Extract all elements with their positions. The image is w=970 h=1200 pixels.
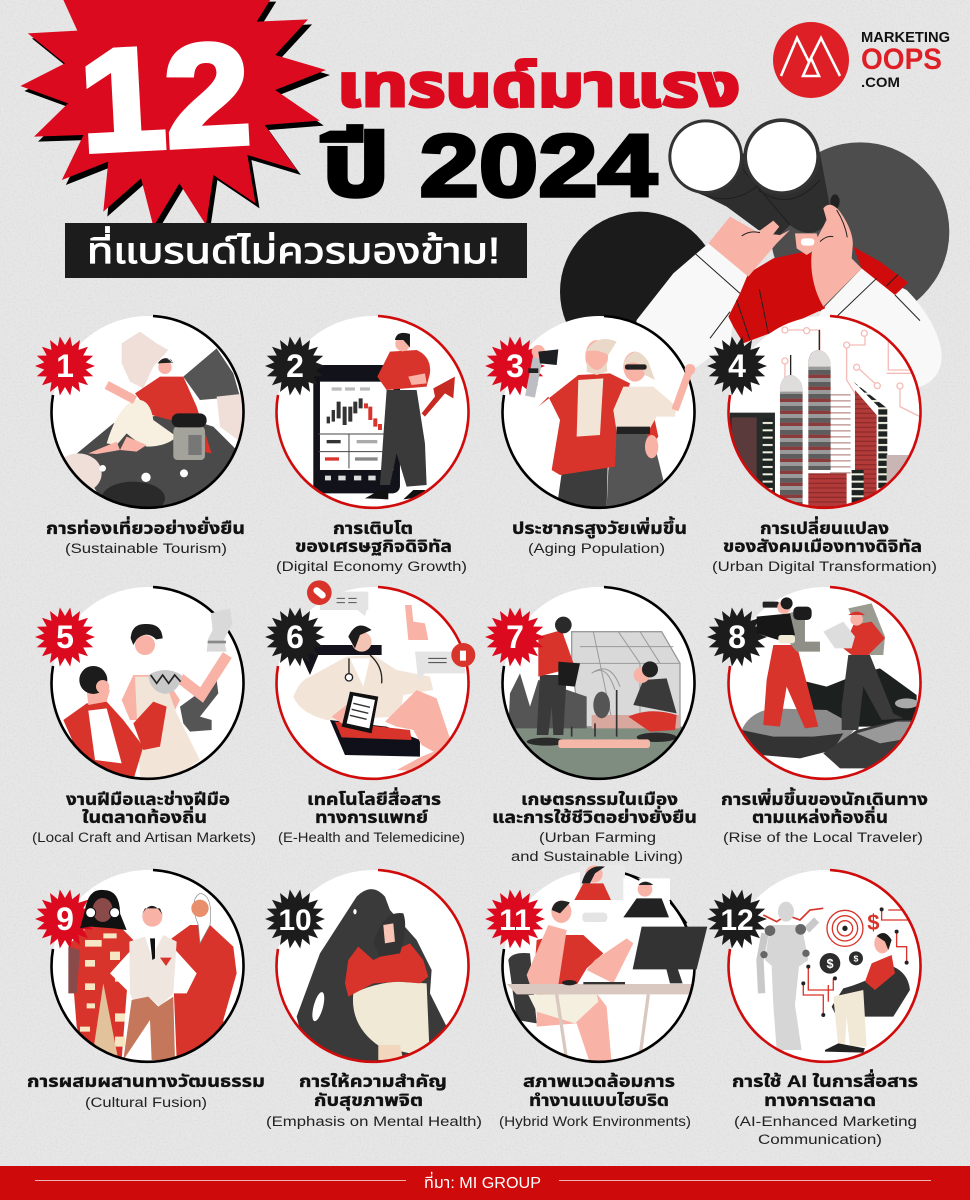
illustration clipped: rocks and bushes	[742, 645, 923, 768]
title 8: การเพิ่มขึ้นของนักเดินทาง	[721, 787, 928, 809]
title 1: การท่องเที่ยวอย่างยั่งยืน	[46, 516, 245, 538]
subtitle banner: ที่แบรนด์ไม่ควรมองข้าม!	[87, 226, 500, 271]
title 12: ทางการตลาด	[764, 1091, 876, 1110]
logo: Marketing Oops: MARKETING	[861, 29, 950, 46]
subtitle 4: (Urban Digital Transformation)	[712, 559, 937, 574]
logo: Marketing Oops: .COM	[861, 74, 900, 90]
subtitle 12: Communication)	[758, 1132, 882, 1147]
logo: Marketing Oops	[773, 22, 950, 98]
ring	[277, 316, 469, 508]
panel: trend 7 urban farming	[485, 587, 697, 864]
panel: trend 2 digital economy	[265, 316, 469, 574]
ring	[52, 587, 244, 779]
title 6	[307, 787, 441, 827]
badge 8	[707, 608, 767, 666]
panel: trend 9 cultural fusion	[27, 870, 265, 1110]
title 11: สภาพแวดล้อมการ	[523, 1072, 675, 1091]
badge 2	[265, 336, 325, 396]
illustration overflow: afro woman head	[80, 890, 127, 930]
ring	[503, 870, 695, 1062]
title 11	[523, 1072, 675, 1110]
illustration overflow: video call and monitor	[551, 865, 707, 983]
badge 9	[35, 890, 95, 948]
badge 10: 10	[278, 904, 312, 937]
badge 5	[35, 608, 95, 666]
badge 9: 9	[56, 901, 74, 937]
illustration overflow: raised arms and heads	[528, 339, 695, 410]
badge 10	[265, 890, 325, 948]
illustration: woman with shadow	[297, 889, 447, 1063]
subtitle 10: (Emphasis on Mental Health)	[266, 1114, 482, 1129]
badge 5: 5	[56, 619, 74, 655]
subtitle banner	[65, 223, 527, 278]
ring	[729, 870, 921, 1062]
title 6: เทคโนโลยีสื่อสาร	[307, 787, 441, 809]
title 9: การผสมผสานทางวัฒนธรรม	[27, 1072, 265, 1091]
ring	[277, 587, 469, 779]
ring	[503, 587, 695, 779]
title 5	[66, 789, 230, 827]
title 7	[492, 790, 697, 827]
badge 2: 2	[286, 348, 304, 384]
starburst badge with 12	[20, 0, 330, 232]
title 10	[299, 1072, 447, 1111]
badge 4	[707, 336, 767, 396]
badge 12: 12	[720, 904, 754, 937]
badge 4: 4	[728, 348, 746, 384]
panel: trend 1 sustainable tourism	[35, 316, 247, 556]
panel: trend 11 hybrid work	[485, 865, 707, 1129]
subtitle 5: (Local Craft and Artisan Markets)	[32, 830, 256, 845]
subtitle 6: (E-Health and Telemedicine)	[278, 830, 465, 845]
subtitle 7: and Sustainable Living)	[511, 849, 683, 864]
illustration clipped: worker at desk	[507, 925, 692, 1063]
illustration overflow: woman's arm, bowl and statue	[131, 608, 232, 695]
illustration: robot, target and man: $	[854, 954, 859, 964]
badge 3	[485, 336, 545, 396]
illustration: robot, target and man: $	[867, 910, 880, 935]
title 2: การเติบโต	[333, 519, 413, 538]
illustration overflow: chat bubbles	[307, 580, 475, 680]
subtitle 11: (Hybrid Work Environments)	[499, 1114, 691, 1129]
illustration clipped: elderly couple	[538, 373, 677, 508]
subtitle 2: (Digital Economy Growth)	[276, 559, 467, 574]
illustration overflow: hikers upper bodies	[757, 597, 885, 655]
badge 1	[35, 336, 95, 396]
ring	[52, 316, 244, 508]
title 7: และการใช้ชีวิตอย่างยั่งยืน	[492, 806, 697, 827]
panel: trend 3 aging population	[485, 316, 695, 556]
illustration: man with phone chart	[313, 333, 455, 499]
title 10: การให้ความสำคัญ	[299, 1072, 447, 1091]
title 8	[721, 787, 928, 827]
title line 1: เทรนด์มาแรง	[337, 52, 740, 119]
panel: trend 5 local craft	[32, 587, 256, 845]
badge 8: 8	[728, 619, 746, 655]
title 4	[723, 516, 922, 556]
badge 3: 3	[506, 348, 524, 384]
ring	[503, 316, 695, 508]
subtitle 8: (Rise of the Local Traveler)	[723, 830, 923, 845]
title 11: ทำงานแบบไฮบริด	[529, 1091, 669, 1110]
title 4: การเปลี่ยนแปลง	[760, 516, 889, 538]
hero illustration: person with binoculars	[560, 118, 949, 388]
ring	[729, 316, 921, 508]
subtitle 7	[511, 830, 683, 864]
illustration: greenhouse gardeners	[509, 616, 682, 778]
ring	[729, 587, 921, 779]
illustration: city skyline with circuits	[730, 327, 920, 510]
illustration clipped: artisans	[63, 666, 218, 780]
ring	[277, 870, 469, 1062]
badge 6: 6	[286, 619, 304, 655]
illustration: three people cultures	[68, 893, 237, 1060]
subtitle 12	[734, 1114, 917, 1147]
logo: Marketing Oops: OOPS	[861, 43, 942, 76]
panel: trend 12 AI marketing	[707, 870, 921, 1147]
badge 6	[265, 608, 325, 666]
panel: trend 4 urban digital	[707, 316, 937, 574]
title 10: กับสุขภาพจิต	[314, 1091, 423, 1111]
badge 11	[485, 890, 545, 948]
panel: trend 6 e-health	[265, 580, 475, 845]
title 5: งานฝีมือและช่างฝีมือ	[66, 789, 230, 809]
badge 1: 1	[56, 348, 74, 384]
starburst badge with 12: 12	[76, 13, 254, 182]
badge 7: 7	[506, 619, 524, 655]
badge 12	[707, 890, 767, 948]
illustration: robot, target and man	[760, 902, 910, 1053]
title 6: ทางการแพทย์	[315, 808, 428, 827]
illustration: traveller on hill	[64, 332, 242, 506]
title 2: ของเศรษฐกิจดิจิทัล	[295, 537, 452, 556]
title line 2: ปี 2024	[321, 116, 657, 215]
subtitle 1: (Sustainable Tourism)	[65, 541, 227, 556]
ring	[52, 870, 244, 1062]
title 7: เกษตรกรรมในเมือง	[521, 790, 678, 809]
title 2	[295, 519, 452, 556]
title 8: ตามแหล่งท้องถิ่น	[752, 806, 888, 827]
title 4: ของสังคมเมืองทางดิจิทัล	[723, 537, 922, 556]
footer bar with source: ที่มา: MI GROUP	[424, 1171, 541, 1192]
subtitle 12: (AI-Enhanced Marketing	[734, 1114, 917, 1129]
subtitle 7: (Urban Farming	[539, 830, 656, 845]
illustration clipped: doctor on phone	[293, 605, 452, 773]
panel: trend 10 mental health	[265, 870, 482, 1129]
footer bar with source	[0, 1166, 970, 1200]
title 3: ประชากรสูงวัยเพิ่มขึ้น	[512, 516, 687, 539]
badge 7	[485, 608, 545, 666]
subtitle 3: (Aging Population)	[528, 541, 665, 556]
title 12	[732, 1069, 918, 1110]
illustration: robot, target and man: $	[826, 957, 833, 971]
panel: trend 8 local traveler	[707, 587, 928, 845]
title 12: การใช้ AI ในการสื่อสาร	[732, 1069, 918, 1091]
subtitle 9: (Cultural Fusion)	[85, 1095, 207, 1110]
title 5: ในตลาดท้องถิ่น	[82, 806, 207, 827]
badge 11: 11	[499, 904, 531, 937]
